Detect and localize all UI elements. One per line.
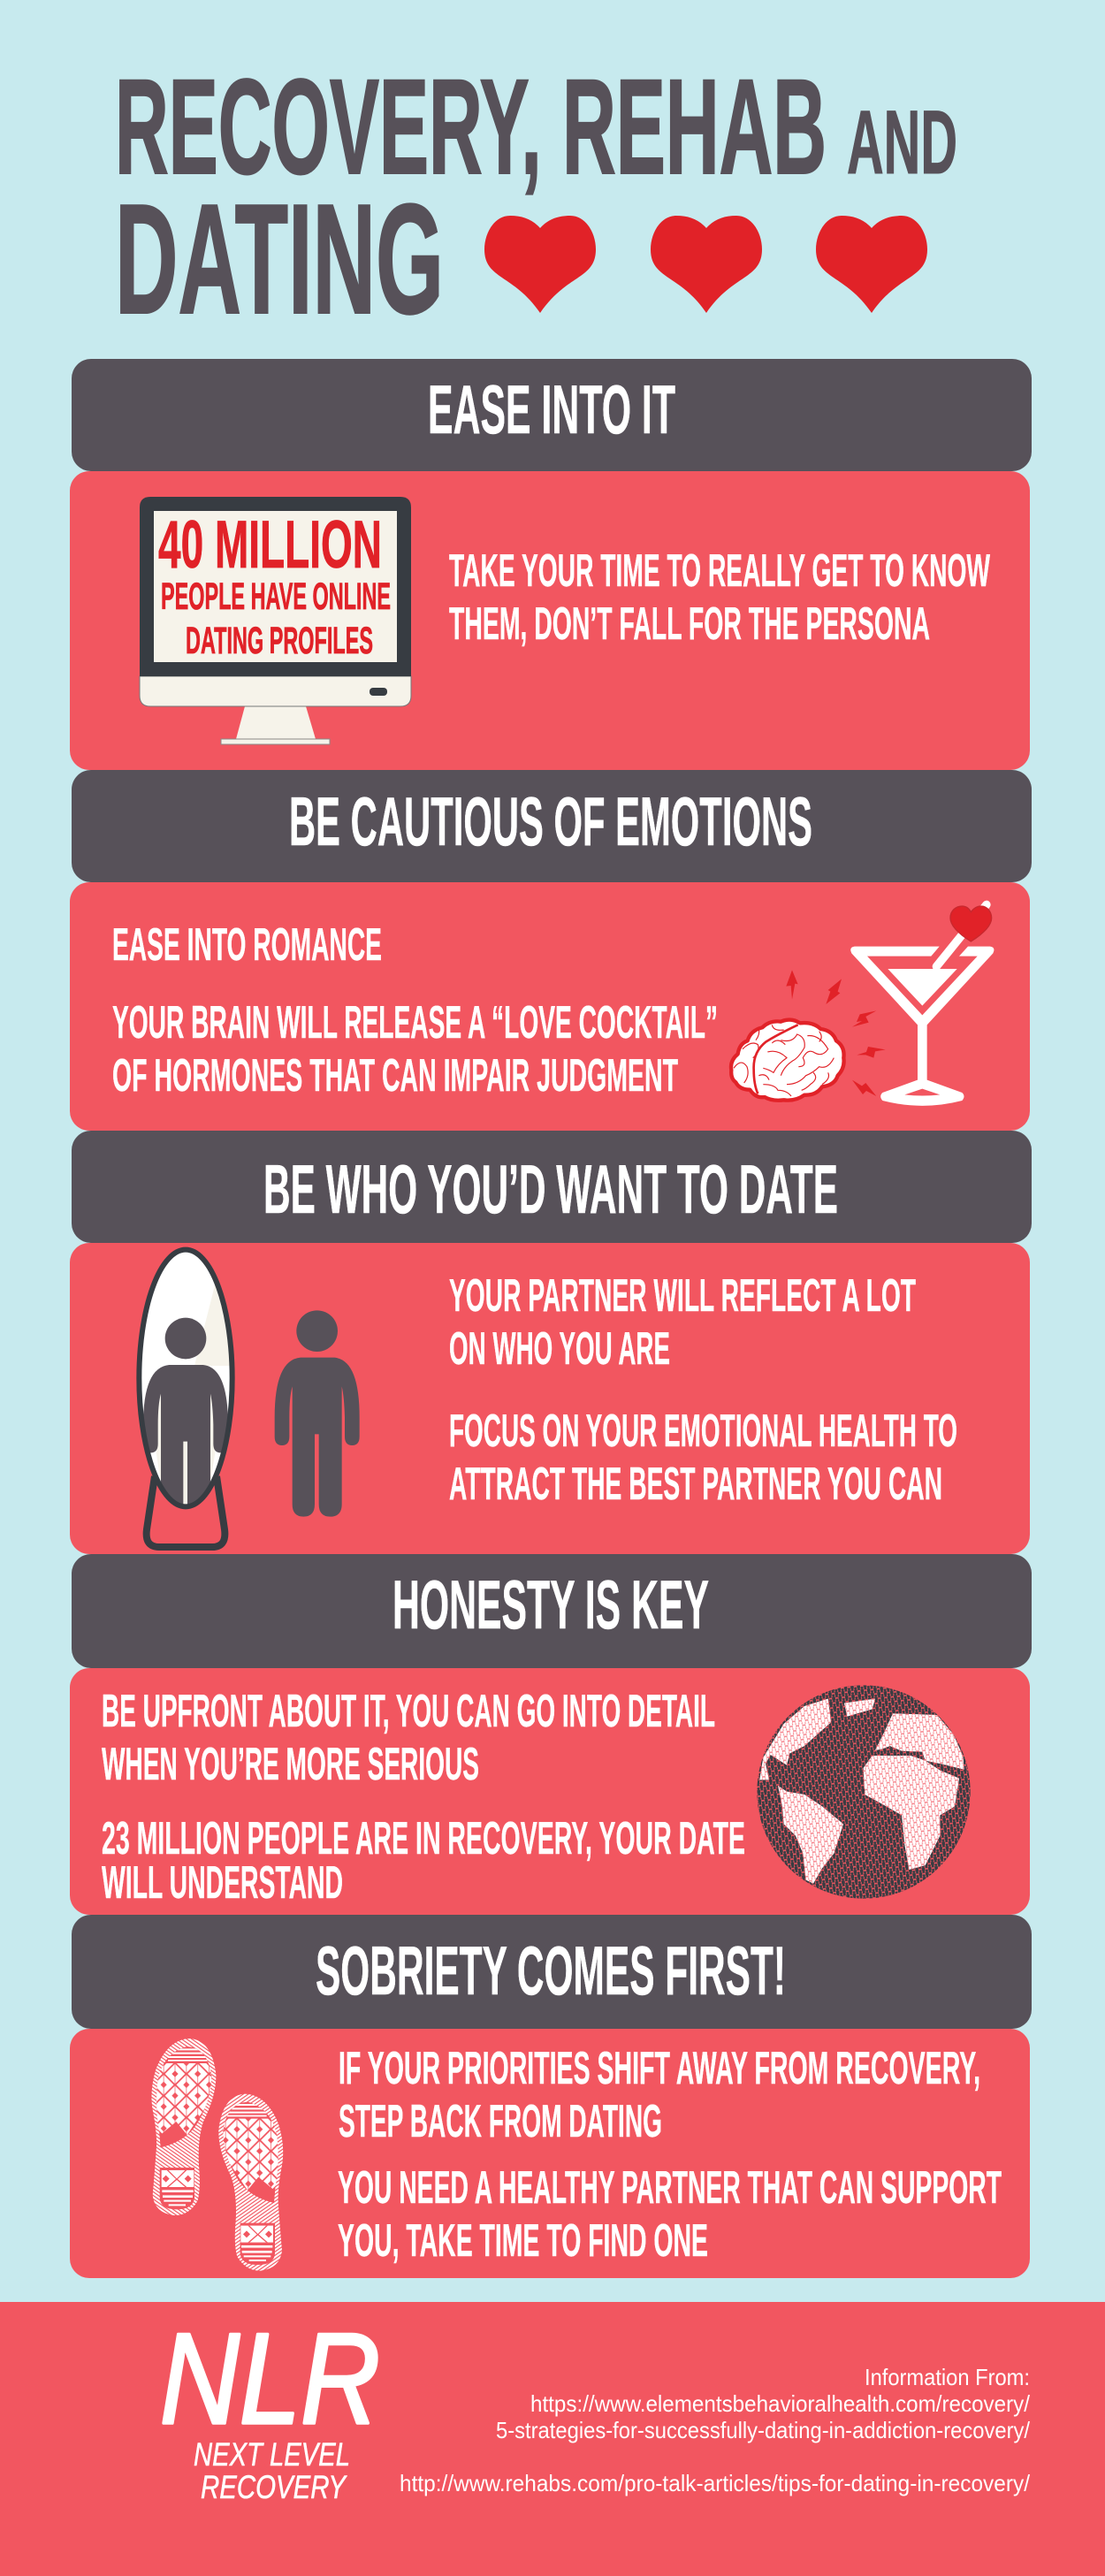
sources: Information From:: [865, 2364, 1030, 2390]
sources: [400, 2364, 1031, 2496]
panel: be who you'd want to date: [70, 1131, 1032, 1554]
logo: next level recovery: NLR: [160, 2306, 380, 2450]
sources: https://www.elementsbehavioralhealth.com/recovery/: [530, 2390, 1031, 2417]
text block: WHEN YOU’RE MORE SERIOUS: [102, 1739, 479, 1790]
logo: next level recovery: [160, 2306, 380, 2505]
title: [115, 51, 957, 347]
logo: next level recovery: NEXT LEVEL: [194, 2436, 350, 2473]
sources: http://www.rehabs.com/pro-talk-articles/tips-for-dating-in-recovery/: [400, 2470, 1031, 2496]
text block: [102, 1686, 745, 1909]
panel: honesty is key: [70, 1554, 1032, 1915]
icon: brain: [731, 1020, 844, 1101]
text block: WILL UNDERSTAND: [102, 1857, 343, 1909]
icon: globe made of people: [757, 1685, 971, 1899]
text block: [449, 545, 990, 650]
text block: [338, 2043, 1002, 2267]
logo: next level recovery: RECOVERY: [201, 2469, 347, 2505]
icon: desktop monitor with statistic: PEOPLE HAVE ONLINE: [161, 575, 391, 618]
text block: [449, 1270, 957, 1510]
text block: YOU, TAKE TIME TO FIND ONE: [338, 2215, 708, 2267]
sources: 5-strategies-for-successfully-dating-in-addiction-recovery/: [496, 2417, 1031, 2443]
text block: EASE INTO ROMANCE: [112, 919, 382, 971]
icon: person looking in a mirror: [139, 1250, 360, 1547]
panel: ease into it: [70, 359, 1032, 770]
icon: desktop monitor with statistic: [140, 497, 411, 744]
text block: STEP BACK FROM DATING: [339, 2096, 662, 2147]
panel: sobriety comes first: [70, 1915, 1032, 2278]
title: AND: [847, 92, 957, 193]
heading: ease into it: EASE INTO IT: [428, 370, 675, 448]
icon: lightning sparks: [786, 970, 886, 1096]
icon: three hearts: [484, 216, 927, 313]
title: DATING: [115, 171, 444, 347]
text block: ON WHO YOU ARE: [449, 1323, 670, 1375]
icon: cocktail glass with heart: [850, 904, 994, 1106]
icon: brain, sparks and cocktail: [731, 904, 994, 1106]
icon: desktop monitor with statistic: 40 MILLION: [158, 507, 382, 583]
icon: desktop monitor with statistic: DATING PROFILES: [186, 620, 373, 662]
icon: shoe prints: [151, 2039, 283, 2271]
icon: mirror: [139, 1250, 245, 1547]
icon: person: [275, 1310, 360, 1517]
footer: [0, 2302, 1105, 2576]
text block: [112, 919, 718, 1101]
panel: be cautious of emotions: [70, 770, 1032, 1131]
heading: honesty is key: HONESTY IS KEY: [392, 1566, 709, 1643]
